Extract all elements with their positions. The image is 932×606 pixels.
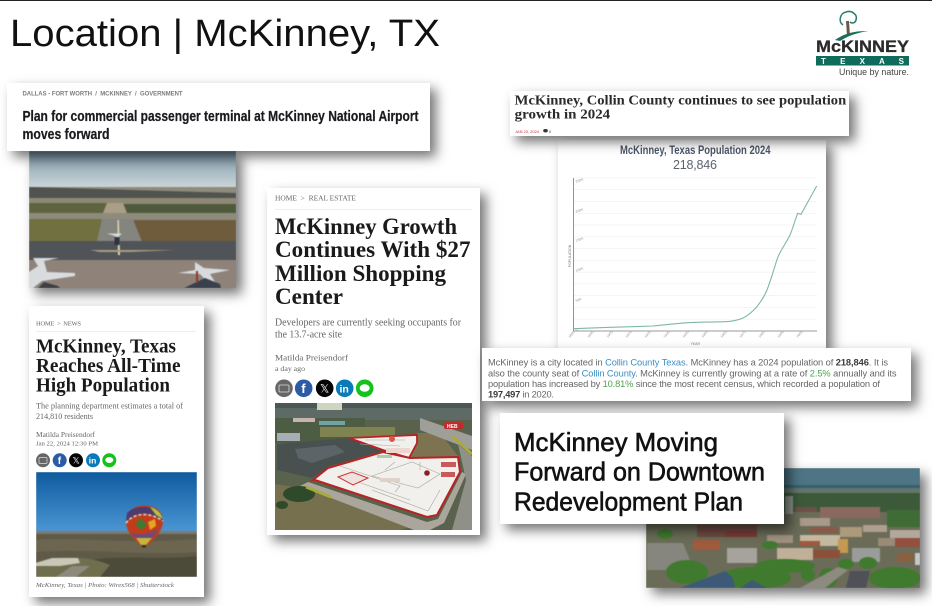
photo: airport runway xyxy=(29,151,236,288)
y axis labels xyxy=(575,177,585,332)
x axis labels: 1930 xyxy=(663,330,671,339)
deck: the 13.7-acre site xyxy=(275,330,343,341)
icons: share buttons: in xyxy=(340,384,349,396)
plane left xyxy=(29,258,75,288)
headline xyxy=(515,92,847,122)
top rule xyxy=(0,0,932,1)
photo: hot air balloon xyxy=(36,472,197,577)
body text: 197,497 in 2020. xyxy=(488,390,554,400)
body text xyxy=(488,358,897,400)
icons: share buttons xyxy=(36,453,116,467)
logo wordmark: McKINNEY xyxy=(816,37,910,56)
headline: Plan for commercial passenger terminal at McKinney National Airport xyxy=(22,108,419,125)
body text: also the county seat of Collin County. McKinney is currently growing at a rate of 2.5% annually and its xyxy=(488,368,897,378)
chart title: McKinney, Texas Population 2024 xyxy=(620,145,771,157)
headline: Reaches All-Time xyxy=(36,355,181,377)
panel: population summary text xyxy=(482,348,911,401)
x axis labels: 1960 xyxy=(720,330,728,339)
icons: share buttons: 𝕏 xyxy=(72,456,80,466)
headline: McKinney, Texas xyxy=(36,336,176,358)
line chart xyxy=(568,177,817,346)
deck: The planning department estimates a total of xyxy=(36,401,183,411)
y axis labels: 0 xyxy=(575,327,578,332)
photo: aerial site plan xyxy=(275,403,472,530)
logo: McKinney Texas xyxy=(816,12,910,78)
headline: Redevelopment Plan xyxy=(514,486,743,516)
x axis labels: 1900 xyxy=(606,330,614,339)
x axis labels: 1880 xyxy=(568,330,576,339)
title: Location | McKinney, TX xyxy=(10,13,440,55)
headline xyxy=(514,427,765,516)
photo: aerial site plan: HEB xyxy=(447,424,458,430)
logo tagline: Unique by nature. xyxy=(839,67,909,78)
byline: Jan 22, 2024 12:30 PM xyxy=(36,441,98,448)
parcel outlines xyxy=(349,435,417,458)
deck: Developers are currently seeking occupants for xyxy=(275,318,462,329)
headline: Million Shopping xyxy=(275,261,446,286)
icons: share buttons xyxy=(275,380,374,397)
byline xyxy=(36,431,98,448)
dateline: 0 xyxy=(549,129,552,134)
body text: McKinney is a city located in Collin County Texas. McKinney has a 2024 population of 218,846. It is xyxy=(488,358,888,368)
breadcrumb: HOME > REAL ESTATE xyxy=(275,194,356,203)
headline: High Population xyxy=(36,375,170,397)
plane right xyxy=(178,262,230,282)
balloon xyxy=(126,506,163,546)
x axis labels: 1910 xyxy=(625,330,633,339)
plane centre xyxy=(108,233,122,238)
x axis labels: 1920 xyxy=(644,330,652,339)
x axis labels xyxy=(568,330,804,339)
breadcrumb: HOME > NEWS xyxy=(36,320,81,328)
panel: airport headline xyxy=(7,83,430,151)
photo: downtown aerial xyxy=(646,468,921,589)
icon: tree xyxy=(835,12,868,41)
line chart: POPULATION xyxy=(568,244,572,267)
byline: Matilda Preisendorf xyxy=(275,353,348,363)
headline xyxy=(22,108,419,143)
x axis labels: 1980 xyxy=(758,330,766,339)
y axis labels: 250K xyxy=(575,177,585,184)
x axis labels: 1990 xyxy=(777,330,785,339)
y axis labels: 50K xyxy=(575,297,583,303)
y axis labels: 150K xyxy=(575,236,585,243)
panel: downtown headline xyxy=(500,413,784,524)
icons: share buttons: in xyxy=(89,456,96,466)
headline: Center xyxy=(275,284,343,309)
panel: shopping center article xyxy=(267,188,480,535)
deck: 214,810 residents xyxy=(36,411,93,421)
logo band: T E X A S xyxy=(821,57,905,66)
deck xyxy=(275,318,462,341)
breadcrumb: DALLAS - FORT WORTH / MCKINNEY / GOVERNMENT xyxy=(22,92,183,98)
headline: McKinney, Collin County continues to see population xyxy=(515,92,847,107)
headline: moves forward xyxy=(22,126,110,143)
panel: Collin County headline xyxy=(510,91,849,136)
y axis labels: 200K xyxy=(575,207,585,214)
byline: Matilda Preisendorf xyxy=(36,431,96,439)
caption: McKinney, Texas | Photo: Wirex568 | Shutterstock xyxy=(35,582,174,589)
deck xyxy=(36,401,183,421)
headline: McKinney Growth xyxy=(275,214,457,239)
y axis labels: 100K xyxy=(575,266,585,273)
x axis labels: 1950 xyxy=(701,330,709,339)
icons: share buttons: f xyxy=(301,381,306,396)
x axis labels: 2000 xyxy=(796,330,804,339)
byline: a day ago xyxy=(275,364,305,373)
population figure: 218,846 xyxy=(673,158,717,172)
byline xyxy=(275,353,348,373)
headline: growth in 2024 xyxy=(515,107,610,122)
icons: share buttons: f xyxy=(58,456,62,467)
headline xyxy=(275,214,470,309)
headline: Continues With $27 xyxy=(275,237,470,262)
panel: population chart xyxy=(558,140,826,350)
x axis labels: 1940 xyxy=(682,330,690,339)
x axis labels: 1890 xyxy=(587,330,595,339)
dateline: JAN 23, 2024 xyxy=(515,129,540,134)
x axis labels: 1970 xyxy=(739,330,747,339)
headline: Forward on Downtown xyxy=(514,456,765,486)
dateline xyxy=(515,129,552,134)
body text: population has increased by 10.81% since the most recent census, which recorded a population of xyxy=(488,379,880,389)
line chart: YEAR xyxy=(690,342,701,346)
icons: share buttons: 𝕏 xyxy=(320,384,330,396)
headline xyxy=(36,336,181,397)
panel: all-time high population article xyxy=(29,306,204,597)
headline: McKinney Moving xyxy=(514,427,718,457)
